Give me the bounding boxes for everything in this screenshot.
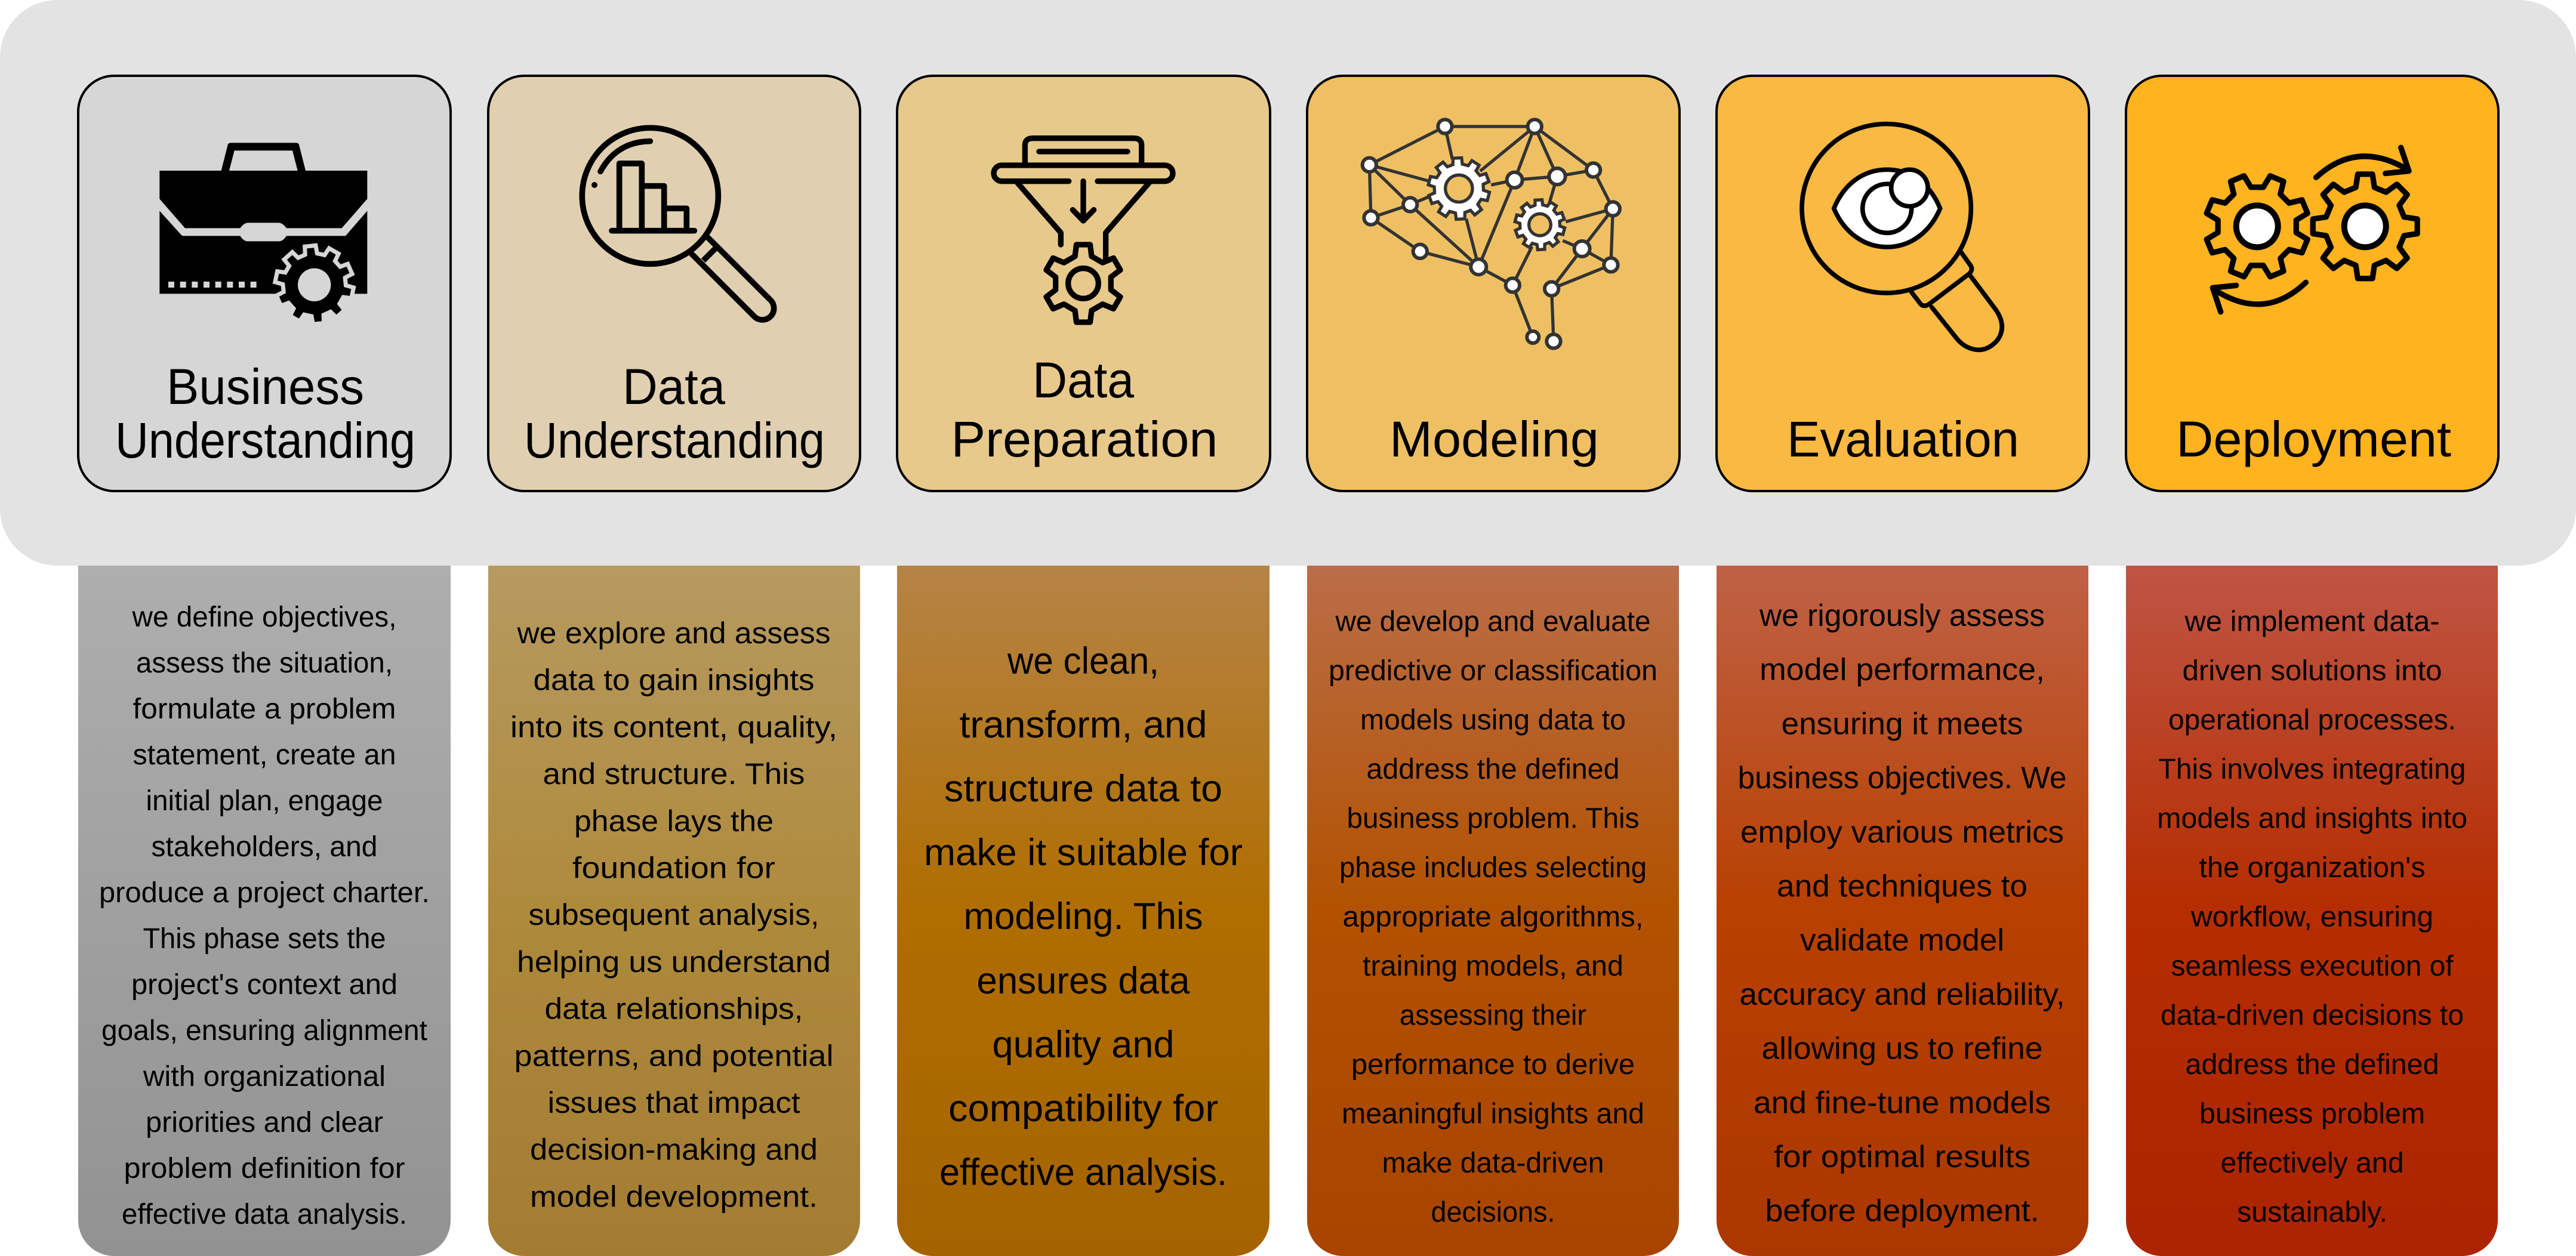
description text: Business Understanding: priorities and clear — [146, 1107, 383, 1138]
header card: Evaluation — [1717, 76, 2089, 491]
description text: Evaluation: allowing us to refine — [1762, 1032, 2042, 1066]
description text: Data Preparation: we clean, — [1007, 640, 1159, 682]
description text: Business Understanding: produce a project charter. — [99, 877, 430, 909]
description text: Business Understanding: assess the situation, — [136, 647, 393, 679]
description text: Data Preparation: transform, and — [960, 704, 1207, 746]
description text: Evaluation: before deployment. — [1765, 1194, 2039, 1229]
description text: Data Preparation: modeling. This — [963, 896, 1203, 937]
description text: Deployment: business problem — [2199, 1098, 2425, 1130]
description text: Deployment — [2157, 606, 2467, 1229]
description text: Modeling: phase includes selecting — [1339, 852, 1647, 884]
title: Deployment: Deployment — [2176, 411, 2451, 467]
header card: Modeling — [1307, 76, 1680, 491]
title: Business Understanding: Understanding — [115, 412, 415, 468]
description text: Modeling: performance to derive — [1351, 1049, 1635, 1081]
description text: Deployment: operational processes. — [2168, 705, 2456, 736]
description text: Evaluation: for optimal results — [1774, 1140, 2030, 1174]
description panel: Data Preparation — [897, 566, 1269, 1256]
description text: Business Understanding: with organizational — [143, 1061, 386, 1093]
description text: Data Understanding — [510, 616, 837, 1213]
description text: Data Understanding: issues that impact — [548, 1086, 800, 1119]
description panel: Deployment — [2126, 566, 2498, 1256]
header card: Deployment — [2126, 76, 2498, 491]
description text: Evaluation: business objectives. We — [1738, 761, 2066, 795]
description text: Modeling: appropriate algorithms, — [1343, 902, 1644, 933]
description text: Data Preparation: effective analysis. — [939, 1152, 1227, 1193]
description text: Deployment: This involves integrating — [2158, 754, 2466, 785]
description text: Modeling — [1329, 606, 1657, 1229]
description text: Evaluation: accuracy and reliability, — [1739, 977, 2065, 1012]
phase column: Data Understanding — [488, 76, 860, 1256]
icon: briefcase with gear — [159, 143, 367, 331]
description text: Data Understanding: data to gain insights — [534, 664, 814, 697]
description text: Modeling: address the defined — [1367, 754, 1620, 785]
icon: magnifying glass over bar chart — [582, 128, 774, 320]
description text: Deployment: seamless execution of — [2171, 951, 2454, 982]
title: Evaluation: Evaluation — [1787, 411, 2019, 467]
description text: Evaluation: and techniques to — [1777, 869, 2027, 903]
description text: Business Understanding: formulate a problem — [133, 693, 396, 725]
description text: Business Understanding: project's context and — [131, 969, 398, 1001]
description text: Data Preparation: make it suitable for — [924, 832, 1243, 874]
description text: Evaluation: validate model — [1800, 923, 2004, 958]
description text: Deployment: driven solutions into — [2182, 655, 2442, 687]
description text: Data Understanding: phase lays the — [574, 804, 774, 838]
description panel: Business Understanding — [78, 566, 451, 1256]
description text: Business Understanding: we define objectives, — [132, 601, 397, 633]
description text: Deployment: workflow, ensuring — [2190, 902, 2433, 933]
phase column: Evaluation — [1717, 76, 2089, 1256]
description text: Evaluation: employ various metrics — [1740, 815, 2064, 850]
description text: Business Understanding: problem definition for — [124, 1153, 405, 1184]
description text: Deployment: data-driven decisions to — [2161, 1000, 2464, 1032]
description text: Deployment: sustainably. — [2237, 1197, 2387, 1229]
description text: Evaluation: and fine-tune models — [1754, 1085, 2051, 1120]
description panel: Modeling — [1307, 566, 1679, 1256]
icon: two gears with cycle arrows — [2190, 147, 2417, 312]
description text: Business Understanding: goals, ensuring alignment — [101, 1015, 427, 1047]
description text: Data Understanding: patterns, and potential — [514, 1039, 833, 1072]
icon: magnifying glass with eye — [1802, 124, 2002, 350]
description text: Business Understanding: initial plan, engage — [146, 785, 383, 817]
description text: Deployment: effectively and — [2220, 1147, 2404, 1179]
title: Data Understanding: Data — [623, 359, 725, 415]
icon: neural network brain with gears — [1363, 119, 1620, 348]
icon: funnel with arrow and gear — [994, 138, 1173, 335]
description text: Modeling: predictive or classification — [1329, 655, 1657, 687]
description text: Modeling: business problem. This — [1346, 803, 1639, 835]
description text: Deployment: address the defined — [2186, 1049, 2439, 1081]
description text: Business Understanding: effective data analysis. — [122, 1199, 407, 1230]
description text: Data Understanding: subsequent analysis, — [529, 898, 819, 931]
description text: Modeling: make data-driven — [1382, 1147, 1604, 1179]
description text: Evaluation — [1738, 598, 2066, 1229]
description text: Data Preparation — [924, 640, 1243, 1193]
title: Business Understanding: Business — [167, 359, 364, 415]
description text: Data Preparation: compatibility for — [948, 1088, 1218, 1130]
description text: Evaluation: we rigorously assess — [1759, 598, 2045, 633]
title: Data Preparation — [951, 352, 1218, 467]
title: Modeling: Modeling — [1389, 411, 1599, 467]
description text: Data Understanding: data relationships, — [544, 992, 803, 1026]
title: Data Preparation: Data — [1033, 352, 1134, 408]
description text: Data Understanding: decision-making and — [530, 1133, 818, 1166]
description text: Data Understanding: and structure. This — [543, 757, 805, 791]
description text: Data Understanding: we explore and assess — [516, 616, 831, 650]
description text: Data Preparation: quality and — [992, 1024, 1175, 1066]
description panel: Evaluation — [1717, 566, 2088, 1256]
header card: Data Preparation — [897, 76, 1270, 491]
description text: Business Understanding: statement, create an — [133, 739, 396, 771]
title: Data Preparation: Preparation — [951, 411, 1218, 467]
description text: Modeling: meaningful insights and — [1342, 1098, 1644, 1130]
description text: Business Understanding — [99, 601, 430, 1230]
description text: Modeling: models using data to — [1360, 705, 1626, 736]
description text: Data Understanding: into its content, quality, — [510, 710, 837, 743]
description text: Deployment: we implement data- — [2184, 606, 2440, 638]
title: Business Understanding — [115, 359, 415, 468]
description panel: Data Understanding — [488, 566, 860, 1256]
header card: Business Understanding — [78, 76, 451, 491]
description text: Modeling: assessing their — [1400, 1000, 1586, 1032]
description text: Data Understanding: helping us understand — [517, 945, 831, 979]
header card: Data Understanding — [488, 76, 860, 491]
description text: Modeling: training models, and — [1363, 951, 1623, 982]
description text: Business Understanding: This phase sets the — [143, 923, 386, 955]
description text: Data Preparation: structure data to — [944, 768, 1222, 810]
description text: Deployment: the organization's — [2199, 852, 2426, 884]
description text: Modeling: decisions. — [1431, 1197, 1555, 1229]
description text: Data Understanding: model development. — [530, 1180, 818, 1213]
description text: Evaluation: model performance, — [1760, 653, 2045, 687]
description text: Modeling: we develop and evaluate — [1335, 606, 1651, 638]
description text: Deployment: models and insights into — [2157, 803, 2467, 835]
description text: Business Understanding: stakeholders, and — [152, 831, 377, 863]
phase column: Business Understanding — [78, 76, 451, 1256]
title: Data Understanding — [524, 359, 825, 468]
header band background panel — [0, 0, 2576, 566]
phase column: Deployment — [2126, 76, 2498, 1256]
phase column: Data Preparation — [897, 76, 1270, 1256]
phase column: Modeling — [1307, 76, 1680, 1256]
description text: Data Preparation: ensures data — [976, 960, 1190, 1002]
description text: Data Understanding: foundation for — [572, 851, 775, 884]
description text: Evaluation: ensuring it meets — [1781, 706, 2023, 741]
title: Data Understanding: Understanding — [524, 412, 825, 468]
